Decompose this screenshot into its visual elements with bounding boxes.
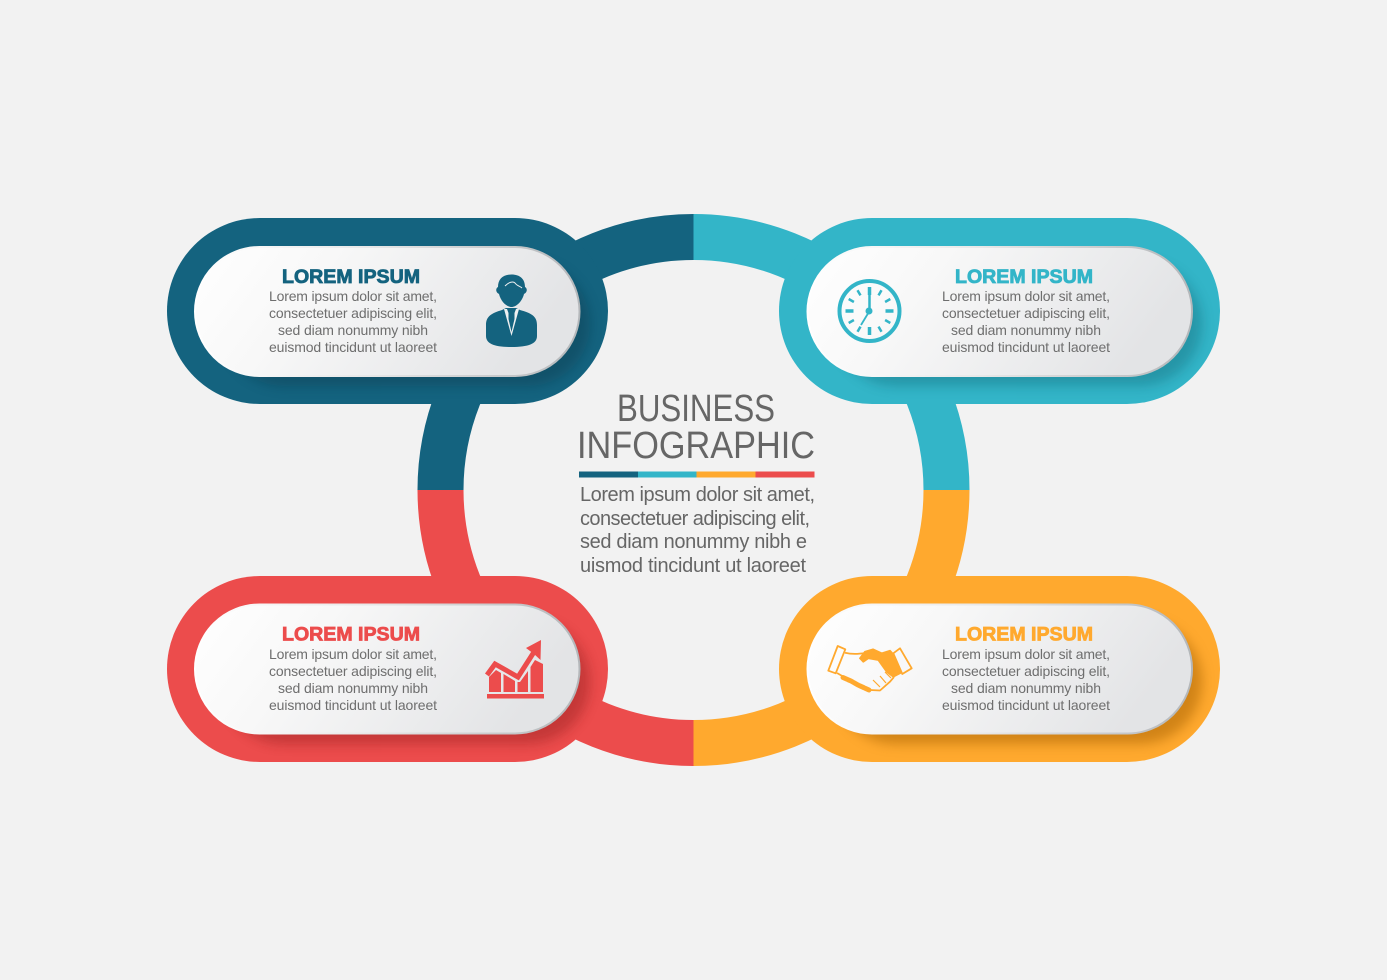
panel: bottom left (167, 576, 608, 762)
center text block: sed diam nonummy nibh e (580, 531, 807, 553)
heading: bottom right: LOREM IPSUM (955, 624, 1093, 646)
text block: bottom left: sed diam nonummy nibh (278, 680, 428, 696)
heading: top right: LOREM IPSUM (955, 267, 1093, 288)
text block: top right (942, 288, 1110, 355)
text block: top right: consectetuer adipiscing elit, (942, 305, 1110, 321)
center text block: Lorem ipsum dolor sit amet, (580, 484, 815, 506)
icon: handshake (828, 646, 912, 690)
text block: top left: sed diam nonummy nibh (278, 322, 428, 338)
text block: top left: consectetuer adipiscing elit, (269, 305, 437, 321)
text block: top left (269, 288, 437, 355)
text block: bottom right: consectetuer adipiscing elit, (942, 663, 1110, 679)
heading: top left: LOREM IPSUM (282, 267, 420, 288)
text block: top right: Lorem ipsum dolor sit amet, (942, 288, 1110, 304)
panel: top right (779, 218, 1220, 404)
panel: top left (167, 218, 608, 404)
text block: bottom right: sed diam nonummy nibh (951, 680, 1101, 696)
panel: bottom right (779, 576, 1220, 762)
text block: top right: sed diam nonummy nibh (951, 322, 1101, 338)
center text block (580, 484, 815, 577)
heading: bottom left: LOREM IPSUM (282, 624, 420, 646)
center text block: uismod tincidunt ut laoreet (580, 555, 806, 577)
text block: top left: Lorem ipsum dolor sit amet, (269, 288, 437, 304)
icon: businessman (486, 274, 537, 347)
text block: bottom right: Lorem ipsum dolor sit amet, (942, 646, 1110, 662)
icon: clock (840, 281, 900, 341)
text block: bottom right (942, 646, 1110, 713)
title (577, 388, 815, 467)
title: BUSINESS (617, 388, 775, 430)
text block: bottom left (269, 646, 437, 713)
icon: growth chart (487, 640, 544, 698)
central ring (440, 237, 946, 743)
title divider (579, 472, 814, 478)
text block: top left: euismod tincidunt ut laoreet (269, 339, 437, 355)
text block: bottom left: euismod tincidunt ut laoreet (269, 697, 437, 713)
text block: bottom left: consectetuer adipiscing elit, (269, 663, 437, 679)
text block: bottom right: euismod tincidunt ut laoreet (942, 697, 1110, 713)
title: INFOGRAPHIC (577, 425, 815, 467)
text block: top right: euismod tincidunt ut laoreet (942, 339, 1110, 355)
text block: bottom left: Lorem ipsum dolor sit amet, (269, 646, 437, 662)
center text block: consectetuer adipiscing elit, (580, 508, 810, 530)
